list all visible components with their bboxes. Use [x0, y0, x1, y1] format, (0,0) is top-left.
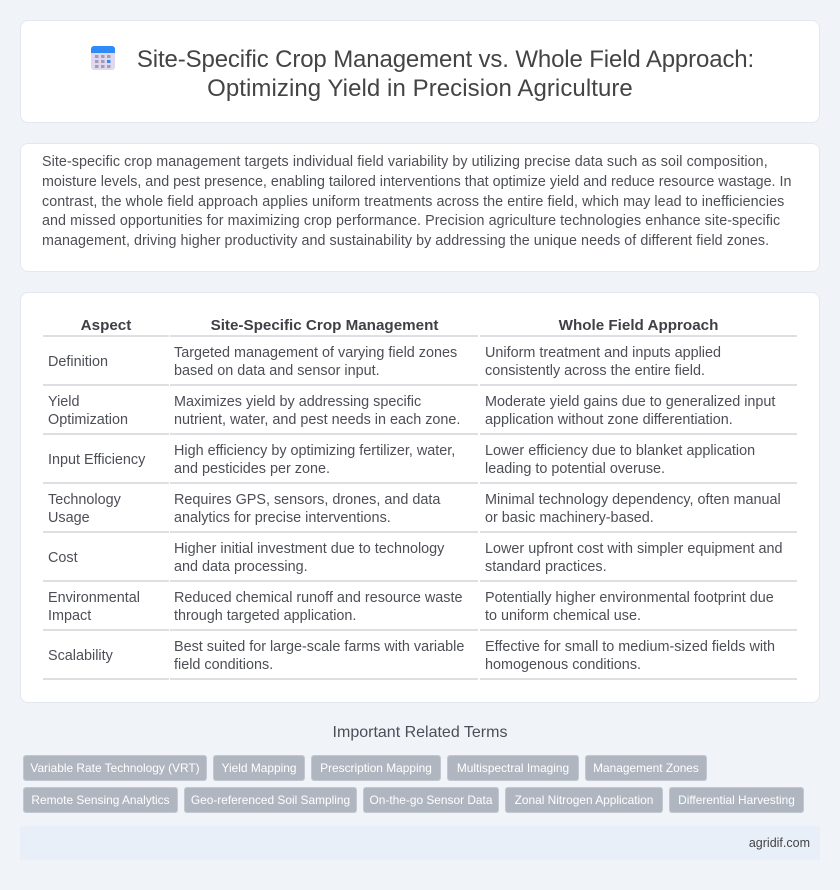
row: Scalability: homogenous conditions. [485, 657, 641, 673]
table header [43, 317, 797, 337]
row: Input Efficiency: High efficiency by optimizing fertilizer, water, [174, 443, 455, 459]
row: Scalability: Best suited for large-scale farms with variable [174, 639, 464, 655]
footer bar [20, 826, 820, 860]
table header: Whole Field Approach [559, 317, 718, 334]
panel: comparison table [20, 292, 820, 703]
tags: related terms: Yield Mapping [222, 761, 296, 775]
row: Environmental Impact: Impact [48, 608, 91, 624]
row: Environmental Impact: Environmental [48, 590, 140, 606]
tags: related terms: Prescription Mapping [320, 761, 432, 775]
row: Yield Optimization: application without zone differentiation. [485, 412, 733, 428]
row: Definition: based on data and sensor input. [174, 363, 380, 379]
row: Definition: Targeted management of varying field zones [174, 345, 457, 361]
row: Technology Usage: analytics for precise interventions. [174, 510, 391, 526]
tags: related terms: Zonal Nitrogen Application [515, 793, 653, 807]
table header: Site-Specific Crop Management [211, 317, 438, 334]
row: Yield Optimization: Maximizes yield by addressing specific [174, 394, 421, 410]
tags: related terms: Multispectral Imaging [457, 761, 569, 775]
row: Definition: consistently across the entire field. [485, 363, 705, 379]
row: Technology Usage [43, 492, 797, 533]
row: Cost: Lower upfront cost with simpler equipment and [485, 541, 783, 557]
tags: related terms: Variable Rate Technology (VRT) [30, 761, 200, 775]
intro paragraph: management, driving higher productivity and sustainability by addressing the unique needs of different field zones. [42, 233, 769, 249]
row: Input Efficiency: Lower efficiency due to blanket application [485, 443, 755, 459]
row: Cost: and data processing. [174, 559, 308, 575]
panel: introduction text [20, 143, 820, 272]
footer site name: agridif.com [749, 836, 810, 850]
row: Technology Usage: Minimal technology dependency, often manual [485, 492, 781, 508]
row: Yield Optimization: Yield [48, 394, 79, 410]
row: Technology Usage: Technology [48, 492, 121, 508]
row: Cost: Cost [48, 550, 78, 566]
intro paragraph [42, 154, 791, 249]
row: Cost: standard practices. [485, 559, 607, 575]
row: Environmental Impact: through targeted application. [174, 608, 356, 624]
tags: related terms: Geo-referenced Soil Sampling [191, 793, 350, 807]
tags: related terms: Remote Sensing Analytics [31, 793, 170, 807]
table header: Aspect [81, 317, 131, 334]
tags: related terms: Differential Harvesting [678, 793, 795, 807]
row: Environmental Impact: Reduced chemical runoff and resource waste [174, 590, 463, 606]
title: Optimizing Yield in Precision Agriculture [207, 75, 633, 102]
title: Site-Specific Crop Management vs. Whole Field Approach: [137, 46, 754, 73]
row: Scalability: field conditions. [174, 657, 273, 673]
intro paragraph: Site-specific crop management targets individual field variability by utilizing precise data such as soil composition, [42, 154, 768, 170]
row: Input Efficiency [43, 443, 797, 484]
heading: related terms: Important Related Terms [333, 724, 507, 741]
row: Technology Usage: Usage [48, 510, 90, 526]
row: Scalability [43, 639, 797, 680]
title [137, 46, 754, 102]
row: Yield Optimization: nutrient, water, and pest needs in each zone. [174, 412, 460, 428]
icon: calendar grid [91, 46, 115, 70]
intro paragraph: and missed opportunities for maximizing crop performance. Precision agriculture technologies enhance site-specific [42, 213, 780, 229]
row: Environmental Impact: to uniform chemical use. [485, 608, 641, 624]
row: Yield Optimization: Optimization [48, 412, 128, 428]
row: Environmental Impact [43, 590, 797, 631]
intro paragraph: contrast, the whole field approach applies uniform treatments across the entire field, which may lead to inefficiencies [42, 194, 784, 210]
row: Scalability: Scalability [48, 648, 113, 664]
row: Environmental Impact: Potentially higher environmental footprint due [485, 590, 774, 606]
row: Definition: Uniform treatment and inputs applied [485, 345, 721, 361]
row: Cost [43, 541, 797, 582]
tags: related terms: On-the-go Sensor Data [370, 793, 492, 807]
row: Yield Optimization [43, 394, 797, 435]
row: Input Efficiency: and pesticides per zone. [174, 461, 330, 477]
row: Input Efficiency: Input Efficiency [48, 452, 145, 468]
row: Scalability: Effective for small to medium-sized fields with [485, 639, 775, 655]
row: Definition [43, 345, 797, 386]
tags: related terms [23, 755, 804, 813]
row: Technology Usage: Requires GPS, sensors, drones, and data [174, 492, 440, 508]
row: Cost: Higher initial investment due to technology [174, 541, 444, 557]
tags: related terms: Management Zones [593, 761, 699, 775]
header panel [20, 20, 820, 123]
row: Input Efficiency: leading to potential overuse. [485, 461, 665, 477]
row: Technology Usage: or basic machinery-based. [485, 510, 654, 526]
row: Yield Optimization: Moderate yield gains due to generalized input [485, 394, 775, 410]
intro paragraph: moisture levels, and pest presence, enabling tailored interventions that optimize yield and reduce resource wastage. In [42, 174, 791, 190]
row: Definition: Definition [48, 354, 108, 370]
